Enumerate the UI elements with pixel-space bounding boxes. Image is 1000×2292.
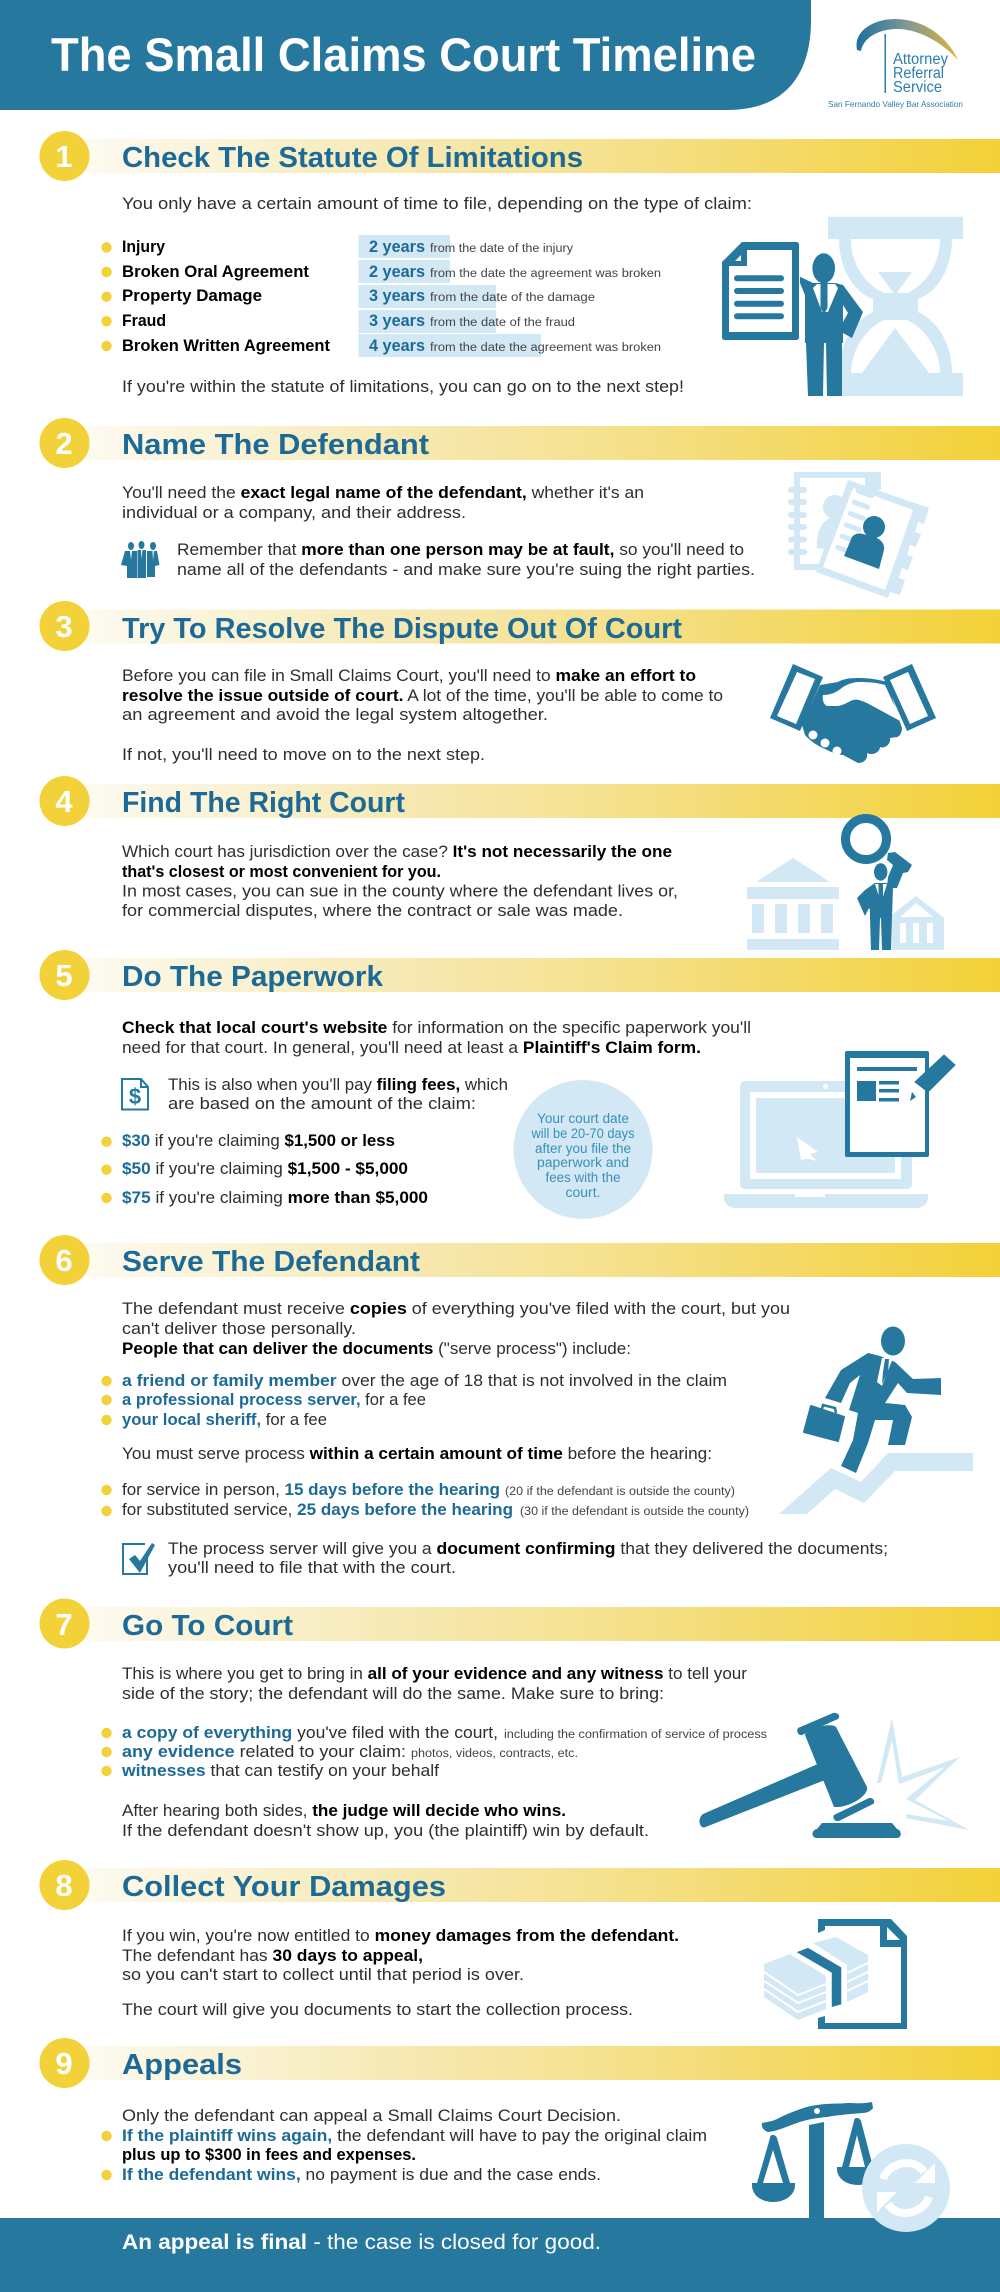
icon: group of people <box>121 541 160 578</box>
statute table: from the date of the damage <box>430 292 595 304</box>
section 8 heading <box>40 1860 1000 1910</box>
process server text: you'll need to file that with the court. <box>168 1558 456 1577</box>
filing fees text: are based on the amount of the claim: <box>168 1094 476 1113</box>
section 9 body text: If the plaintiff wins again, the defendant will have to pay the original claim <box>122 2126 707 2145</box>
section 5 body text: Check that local court's website for information on the specific paperwork you'll <box>122 1018 751 1037</box>
icon: hourglass and man with document <box>722 217 963 396</box>
section 5 body text: need for that court. In general, you'll need at least a Plaintiff's Claim form. <box>122 1038 701 1057</box>
section 7 body text: This is where you get to bring in all of your evidence and any witness to tell your <box>122 1664 747 1683</box>
section 8 heading: Collect Your Damages <box>122 1871 446 1903</box>
list: service deadlines <box>101 1480 749 1519</box>
statute table: 3 years <box>369 286 425 305</box>
section 1 intro text: You only have a certain amount of time to file, depending on the type of claim: <box>122 194 752 213</box>
section 1 heading: Check The Statute Of Limitations <box>122 142 583 174</box>
list: what to bring: any evidence related to your claim: <box>122 1742 406 1761</box>
callout: court date circle: court. <box>566 1185 600 1200</box>
fee list: $50 if you're claiming $1,500 - $5,000 <box>122 1159 408 1178</box>
list: who can serve <box>101 1371 727 1429</box>
section 4 body text: In most cases, you can sue in the county where the defendant lives or, <box>122 882 678 900</box>
section 4 body text: Which court has jurisdiction over the case? It's not necessarily the one <box>122 842 672 861</box>
icon: money stacks and document <box>764 1919 907 2029</box>
icon: laptop and tablet form <box>724 1051 955 1208</box>
section 5 heading: 5 <box>55 958 73 993</box>
section 8 body text: If you win, you're now entitled to money damages from the defendant. <box>122 1926 679 1945</box>
section 3 body text: Before you can file in Small Claims Court, you'll need to make an effort to <box>122 666 696 685</box>
icon: gavel and impact star <box>699 1713 969 1838</box>
section 5 heading <box>40 950 1000 1000</box>
section 6 heading: Serve The Defendant <box>122 1246 420 1278</box>
section 5 body text <box>122 1018 751 1057</box>
section 8 heading: 8 <box>55 1868 73 1903</box>
list: what to bring: including the confirmation of service of process <box>504 1729 767 1741</box>
section 6 body text: can't deliver those personally. <box>122 1319 356 1338</box>
judge decision text <box>122 1801 649 1840</box>
judge decision text: After hearing both sides, the judge will decide who wins. <box>122 1801 566 1820</box>
statute table: 2 years <box>369 237 425 256</box>
list: service deadlines: (30 if the defendant is outside the county) <box>520 1506 749 1518</box>
title: The Small Claims Court Timeline <box>51 28 756 81</box>
service timing text: You must serve process within a certain amount of time before the hearing: <box>122 1444 712 1463</box>
process server text: The process server will give you a document confirming that they delivered the documents; <box>168 1539 888 1558</box>
section 1 heading <box>40 131 1000 181</box>
statute table: 2 years <box>369 262 425 281</box>
section 8 body text: The defendant has 30 days to appeal, <box>122 1946 423 1965</box>
section 6 body text: The defendant must receive copies of everything you've filed with the court, but you <box>122 1299 790 1318</box>
section 9 body text: plus up to $300 in fees and expenses. <box>122 2145 416 2164</box>
logo: Attorney Referral Service: Attorney <box>893 51 948 68</box>
statute table: 4 years <box>369 336 425 355</box>
section 7 heading: 7 <box>55 1607 73 1642</box>
statute table: from the date the agreement was broken <box>430 268 661 280</box>
judge decision text: If the defendant doesn't show up, you (the plaintiff) win by default. <box>122 1821 649 1840</box>
statute table: Broken Written Agreement <box>122 336 330 355</box>
filing fees text <box>168 1075 508 1113</box>
section 3 heading: 3 <box>55 609 73 644</box>
section 9 heading: Appeals <box>122 2049 242 2081</box>
section 4 heading <box>40 776 1000 826</box>
section 4 heading: 4 <box>55 784 73 819</box>
logo: Attorney Referral Service: San Fernando Valley Bar Association <box>828 99 963 109</box>
list: what to bring <box>101 1723 767 1780</box>
section 6 body text <box>122 1299 790 1358</box>
statute table <box>101 235 661 357</box>
statute table: from the date of the injury <box>430 243 573 255</box>
logo: Attorney Referral Service: Referral <box>893 65 944 82</box>
section 3 heading <box>40 601 1000 651</box>
section 8 body text <box>122 1926 679 2019</box>
section 9 heading <box>40 2038 1000 2088</box>
section 7 heading <box>40 1598 1000 1648</box>
list: service deadlines: for substituted service, 25 days before the hearing <box>122 1500 513 1519</box>
callout: court date circle: after you file the <box>535 1141 631 1156</box>
callout: court date circle: paperwork and <box>537 1155 629 1170</box>
list: what to bring: witnesses that can testify on your behalf <box>121 1761 439 1780</box>
section 7 body text <box>122 1664 747 1703</box>
icon: dollar document <box>122 1079 148 1110</box>
callout: court date circle <box>514 1080 652 1219</box>
section 3 body text: resolve the issue outside of court. A lot of the time, you'll be able to come to <box>122 686 723 705</box>
callout: court date circle: fees with the <box>546 1170 620 1185</box>
list: what to bring: a copy of everything you've filed with the court, <box>122 1723 498 1742</box>
section 2 reminder text: Remember that more than one person may be at fault, so you'll need to <box>177 540 744 559</box>
section 9 heading: 9 <box>55 2046 73 2081</box>
icon: checked document <box>123 1543 155 1574</box>
section 2 heading <box>40 418 1000 468</box>
section 2 body text: You'll need the exact legal name of the defendant, whether it's an <box>122 483 644 502</box>
icon: running businessman on stairs <box>779 1326 973 1514</box>
callout: court date circle: Your court date <box>537 1111 629 1126</box>
icon: handshake <box>770 664 936 763</box>
section 3 heading: Try To Resolve The Dispute Out Of Court <box>122 613 682 645</box>
section 8 body text: The court will give you documents to start the collection process. <box>122 2000 633 2019</box>
statute table: 3 years <box>369 311 425 330</box>
statute table: Injury <box>122 237 165 256</box>
section 4 body text <box>122 842 678 920</box>
footer band <box>0 2218 1000 2292</box>
section 9 body text <box>101 2106 707 2184</box>
section 6 heading: 6 <box>55 1243 73 1278</box>
icon: scales of justice with refresh circle <box>752 2102 950 2232</box>
icon: courthouses and man with magnifying glass <box>747 818 944 950</box>
section 2 reminder text: name all of the defendants - and make sure you're suing the right parties. <box>177 560 755 579</box>
fee list: $30 if you're claiming $1,500 or less <box>122 1131 395 1150</box>
section 6 heading <box>40 1235 1000 1285</box>
section 2 heading: Name The Defendant <box>122 429 429 461</box>
statute table: Fraud <box>122 311 166 330</box>
section 1 heading: 1 <box>55 139 73 174</box>
fee list: $75 if you're claiming more than $5,000 <box>122 1188 428 1207</box>
logo: Attorney Referral Service: Service <box>893 79 942 96</box>
section 2 reminder text <box>177 540 755 579</box>
list: service deadlines: (20 if the defendant is outside the county) <box>505 1486 735 1498</box>
header banner <box>0 0 811 110</box>
statute table: from the date of the fraud <box>430 317 575 329</box>
callout: court date circle: will be 20-70 days <box>531 1126 635 1141</box>
statute table: Property Damage <box>122 286 262 305</box>
statute table: Broken Oral Agreement <box>122 262 309 281</box>
section 3 body text: an agreement and avoid the legal system altogether. <box>122 705 548 724</box>
statute table: from the date the agreement was broken <box>430 342 661 354</box>
section 5 heading: Do The Paperwork <box>122 961 384 993</box>
filing fees text: This is also when you'll pay filing fees, which <box>168 1075 508 1094</box>
list: who can serve: a professional process server, for a fee <box>122 1390 426 1409</box>
list: who can serve: your local sheriff, for a fee <box>122 1410 327 1429</box>
icon: dollar document: $ <box>129 1084 141 1109</box>
footer text: An appeal is final - the case is closed for good. <box>122 2231 601 2254</box>
logo: Attorney Referral Service <box>828 19 963 109</box>
fee list <box>101 1131 428 1207</box>
section 3 body text: If not, you'll need to move on to the next step. <box>122 745 485 764</box>
section 2 heading: 2 <box>55 426 73 461</box>
list: service deadlines: for service in person, 15 days before the hearing <box>122 1480 500 1499</box>
section 6 body text: People that can deliver the documents ("serve process") include: <box>122 1339 631 1358</box>
section 9 body text: Only the defendant can appeal a Small Claims Court Decision. <box>122 2106 621 2125</box>
section 7 body text: side of the story; the defendant will do the same. Make sure to bring: <box>122 1684 664 1703</box>
section 3 body text <box>122 666 723 764</box>
icon: address book and person <box>788 472 929 598</box>
section 2 body text <box>122 483 644 522</box>
list: who can serve: a friend or family member over the age of 18 that is not involved in the claim <box>122 1371 727 1390</box>
section 9 body text: If the defendant wins, no payment is due and the case ends. <box>122 2165 601 2184</box>
section 7 heading: Go To Court <box>122 1610 293 1642</box>
section 1 closing text: If you're within the statute of limitations, you can go on to the next step! <box>122 377 684 396</box>
section 8 body text: so you can't start to collect until that period is over. <box>122 1965 524 1984</box>
section 4 body text: for commercial disputes, where the contract or sale was made. <box>122 901 623 920</box>
list: what to bring: photos, videos, contracts, etc. <box>411 1748 578 1760</box>
section 4 heading: Find The Right Court <box>122 787 405 819</box>
process server text <box>168 1539 888 1577</box>
section 2 body text: individual or a company, and their address. <box>122 503 466 522</box>
section 4 body text: that's closest or most convenient for you. <box>122 862 441 881</box>
